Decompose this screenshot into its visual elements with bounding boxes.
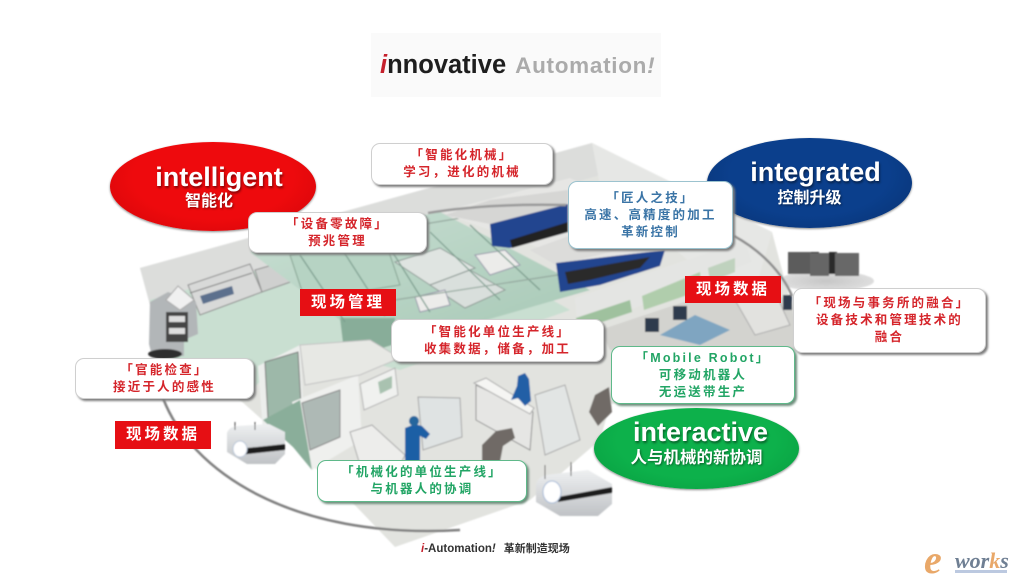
callout: 现场与事务所的融合: 融合 bbox=[875, 330, 904, 344]
callout: 现场与事务所的融合 bbox=[793, 288, 986, 353]
heading: interactive: interactive bbox=[633, 417, 768, 447]
label: 现场数据 right: 现场数据 bbox=[696, 281, 770, 298]
callout: 现场与事务所的融合: 「现场与事务所的融合」 bbox=[809, 296, 970, 310]
oval: integrated bbox=[707, 138, 912, 228]
callout: 智能化单位生产线: 收集数据，储备，加工 bbox=[424, 342, 571, 356]
back walls bbox=[140, 143, 772, 400]
callout: 匠人之技: 革新控制 bbox=[621, 224, 680, 238]
central glass clean room bbox=[250, 200, 590, 360]
mobile robot right bbox=[536, 462, 612, 516]
oval: interactive bbox=[594, 408, 799, 489]
callout: Mobile Robot: 无运送带生产 bbox=[659, 384, 747, 398]
machining lines with blue heads bbox=[440, 178, 700, 292]
left workbench bbox=[188, 260, 296, 315]
logo panel bbox=[371, 33, 661, 97]
callout: Mobile Robot bbox=[611, 346, 795, 404]
footer caption: i-Automation! 革新制造现场 bbox=[421, 543, 570, 555]
callout: 机械化的单位生产线 bbox=[317, 460, 527, 502]
logo wordmark: innovative Automation! bbox=[380, 51, 655, 79]
label: 现场数据 left: 现场数据 bbox=[126, 426, 200, 443]
subheading: 控制升级: 控制升级 bbox=[777, 190, 842, 207]
label: 现场数据 left bbox=[115, 421, 211, 449]
callout: 匠人之技 bbox=[568, 181, 733, 249]
heading: integrated: integrated bbox=[750, 157, 881, 187]
service robot bbox=[148, 286, 198, 359]
callout: 智能化机械: 「智能化机械」 bbox=[411, 148, 513, 162]
callout: Mobile Robot: 「Mobile Robot」 bbox=[636, 350, 770, 364]
callout: 设备零故障: 「设备零故障」 bbox=[286, 216, 389, 230]
oval: intelligent bbox=[110, 142, 316, 231]
callout: 官能检查: 「官能检查」 bbox=[120, 362, 209, 376]
mobile robot left bbox=[227, 422, 285, 464]
watermark letter e: e bbox=[924, 537, 942, 582]
callout: 智能化机械: 学习，进化的机械 bbox=[403, 165, 521, 179]
callout: 智能化单位生产线: 「智能化单位生产线」 bbox=[424, 324, 571, 338]
label: 现场管理: 现场管理 bbox=[311, 294, 385, 311]
label: 现场管理 bbox=[300, 289, 396, 316]
callout: Mobile Robot: 可移动机器人 bbox=[659, 368, 747, 382]
subheading: 智能化: 智能化 bbox=[185, 193, 233, 210]
workers and cell line bbox=[350, 373, 612, 475]
cleanroom pods bbox=[258, 340, 400, 470]
subheading: 人与机械的新协调: 人与机械的新协调 bbox=[630, 449, 762, 467]
callout: 智能化单位生产线 bbox=[391, 319, 604, 362]
label: 现场数据 right bbox=[685, 276, 781, 303]
callout: 设备零故障: 预兆管理 bbox=[308, 234, 367, 248]
watermark: e-works bbox=[924, 537, 1009, 582]
curved ring line bbox=[163, 205, 792, 531]
callout: 官能检查: 接近于人的感性 bbox=[113, 380, 216, 394]
server racks bbox=[778, 252, 874, 291]
watermark underline bbox=[955, 570, 1007, 573]
callout: 官能检查 bbox=[75, 358, 254, 399]
long partition wall bbox=[575, 240, 752, 330]
callout: 机械化的单位生产线: 「机械化的单位生产线」 bbox=[341, 465, 503, 479]
callout: 设备零故障 bbox=[248, 212, 427, 253]
office area bbox=[600, 285, 798, 350]
callout: 机械化的单位生产线: 与机器人的协调 bbox=[371, 482, 473, 496]
heading: intelligent: intelligent bbox=[155, 162, 283, 192]
callout: 匠人之技: 高速、高精度的加工 bbox=[584, 208, 717, 222]
callout: 匠人之技: 「匠人之技」 bbox=[606, 190, 695, 204]
callout: 现场与事务所的融合: 设备技术和管理技术的 bbox=[816, 313, 963, 327]
building floor plate bbox=[140, 143, 800, 547]
callout: 智能化机械 bbox=[371, 143, 553, 185]
watermark word works: works bbox=[955, 548, 1009, 573]
